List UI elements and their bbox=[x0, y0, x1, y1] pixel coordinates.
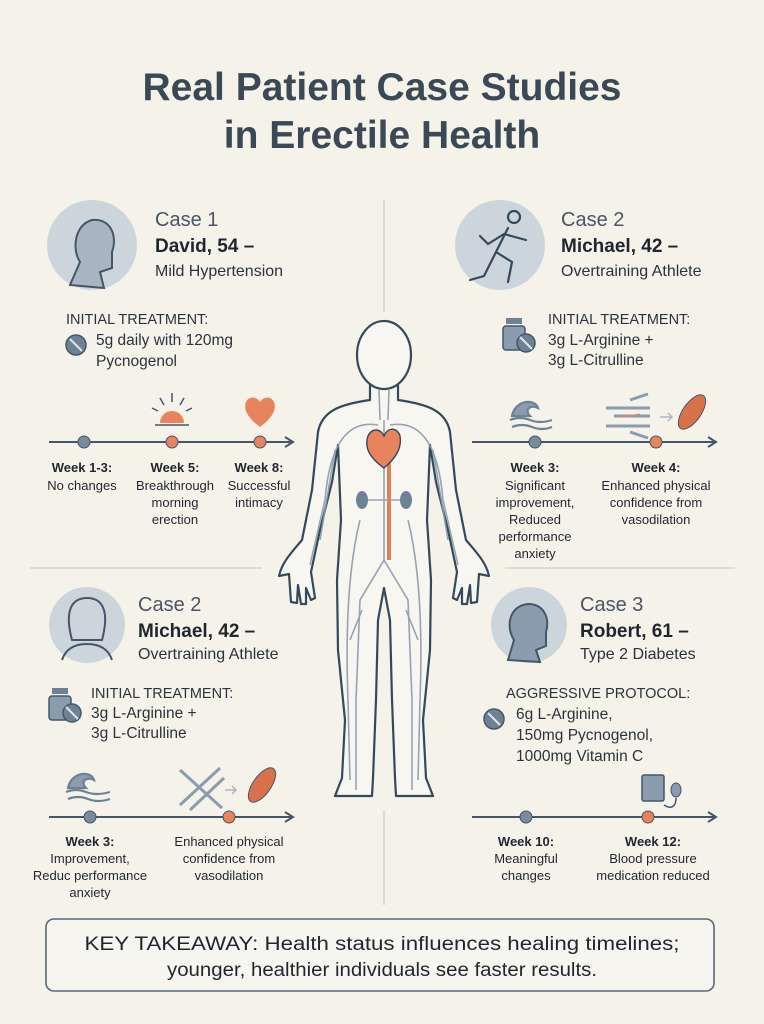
timeline case 3 bbox=[472, 811, 716, 823]
panel: case 1 David: Case 1 bbox=[155, 209, 218, 231]
panel: case 2 Michael top: 3g L-Arginine + bbox=[548, 332, 654, 349]
panel: case 3 Robert: Type 2 Diabetes bbox=[580, 646, 696, 663]
icon: bottle bbox=[503, 318, 535, 352]
icon: avatar David bbox=[47, 200, 137, 290]
panel: case 3 Robert: Blood pressure bbox=[609, 851, 697, 866]
panel: case 1 David: No changes bbox=[47, 478, 117, 493]
panel: case 1 David: Week 1-3: bbox=[52, 460, 112, 475]
panel: case 1 David: David, 54 – bbox=[155, 236, 254, 257]
icon: vessel to muscle bbox=[180, 763, 281, 810]
panel: case 3 Robert: 150mg Pycnogenol, bbox=[516, 727, 653, 744]
panel: case 2 Michael top bbox=[455, 200, 716, 561]
icon: heart bbox=[367, 429, 400, 468]
title: in Erectile Health bbox=[224, 114, 540, 157]
panel: case 2 Michael top: 3g L-Citrulline bbox=[548, 352, 644, 369]
panel: case 3 Robert: changes bbox=[501, 868, 551, 883]
icon: avatar runner bbox=[455, 200, 545, 290]
panel: case 2 Michael bottom: Reduc performance bbox=[33, 868, 147, 883]
panel: case 2 Michael bottom: 3g L-Arginine + bbox=[91, 705, 197, 722]
panel: case 2 Michael bottom: Enhanced physical bbox=[174, 834, 284, 849]
panel: case 1 David: intimacy bbox=[235, 495, 283, 510]
panel: case 2 Michael bottom: Overtraining Athlete bbox=[138, 646, 279, 663]
panel: case 1 David: Week 5: bbox=[151, 460, 199, 475]
panel: case 2 Michael top: confidence from bbox=[610, 495, 702, 510]
icon: blood pressure cuff bbox=[642, 775, 681, 807]
panel: case 1 David: Successful bbox=[228, 478, 291, 493]
panel: case 2 Michael bottom: INITIAL TREATMENT: bbox=[91, 686, 233, 702]
panel: case 2 Michael top: improvement, bbox=[496, 495, 574, 510]
panel: case 1 David: erection bbox=[152, 512, 198, 527]
panel: case 2 Michael top: Case 2 bbox=[561, 209, 624, 231]
panel: case 2 Michael top: Week 4: bbox=[632, 460, 680, 475]
panel: case 2 Michael bottom: 3g L-Citrulline bbox=[91, 725, 187, 742]
panel: case 2 Michael bottom: vasodilation bbox=[195, 868, 263, 883]
panel: case 1 David bbox=[47, 200, 293, 527]
panel: case 1 David: 5g daily with 120mg bbox=[96, 332, 233, 349]
panel: case 3 Robert: 6g L-Arginine, bbox=[516, 706, 613, 723]
callout: key takeaway bbox=[46, 919, 714, 991]
dividers bbox=[30, 200, 735, 905]
panel: case 3 Robert: medication reduced bbox=[596, 868, 710, 883]
panel: case 3 Robert: Week 10: bbox=[498, 834, 554, 849]
panel: case 2 Michael top: INITIAL TREATMENT: bbox=[548, 312, 690, 328]
panel: case 1 David: morning bbox=[152, 495, 198, 510]
panel: case 3 Robert: Week 12: bbox=[625, 834, 681, 849]
panel: case 2 Michael bottom: Improvement, bbox=[50, 851, 130, 866]
panel: case 3 Robert: AGGRESSIVE PROTOCOL: bbox=[506, 686, 690, 702]
panel: case 1 David: Pycnogenol bbox=[96, 353, 177, 370]
panel: case 3 Robert: Case 3 bbox=[580, 594, 643, 616]
icon: wave bbox=[66, 774, 110, 801]
panel: case 3 Robert: Robert, 61 – bbox=[580, 621, 689, 642]
callout: key takeaway: younger, healthier individuals see faster results. bbox=[167, 960, 597, 981]
panel: case 2 Michael top: Overtraining Athlete bbox=[561, 263, 702, 280]
panel: case 3 Robert: Meaningful bbox=[494, 851, 558, 866]
timeline case 1 bbox=[49, 436, 293, 448]
panel: case 2 Michael top: vasodilation bbox=[622, 512, 690, 527]
icon: pill bbox=[484, 709, 504, 729]
panel: case 3 Robert bbox=[472, 587, 716, 883]
panel: case 1 David: Breakthrough bbox=[136, 478, 214, 493]
panel: case 2 Michael bottom: anxiety bbox=[69, 885, 111, 900]
panel: case 2 Michael top: Reduced bbox=[509, 512, 561, 527]
panel: case 2 Michael bottom bbox=[33, 587, 293, 900]
panel: case 2 Michael top: Enhanced physical bbox=[601, 478, 711, 493]
panel: case 2 Michael bottom: Week 3: bbox=[66, 834, 114, 849]
panel: case 2 Michael top: anxiety bbox=[514, 546, 556, 561]
timeline case 2 top bbox=[472, 436, 716, 448]
panel: case 1 David: INITIAL TREATMENT: bbox=[66, 312, 208, 328]
panel: case 1 David: Mild Hypertension bbox=[155, 263, 283, 280]
icon: wave bbox=[510, 402, 552, 429]
panel: case 1 David: Week 8: bbox=[235, 460, 283, 475]
timeline case 2 bottom bbox=[49, 811, 293, 823]
title bbox=[142, 66, 622, 157]
panel: case 2 Michael top: performance bbox=[499, 529, 571, 544]
panel: case 2 Michael bottom: Case 2 bbox=[138, 594, 201, 616]
icon: sunrise bbox=[152, 393, 192, 425]
title: Real Patient Case Studies bbox=[142, 66, 622, 109]
icon: bottle bbox=[49, 688, 81, 722]
icon: pill bbox=[66, 335, 86, 355]
panel: case 2 Michael bottom: Michael, 42 – bbox=[138, 621, 255, 642]
icon: avatar Michael bbox=[49, 587, 125, 663]
body illustration bbox=[279, 321, 489, 796]
panel: case 2 Michael top: Michael, 42 – bbox=[561, 236, 678, 257]
icon: heart small bbox=[245, 398, 275, 427]
panel: case 2 Michael top: Week 3: bbox=[511, 460, 559, 475]
panel: case 2 Michael bottom: confidence from bbox=[183, 851, 275, 866]
icon: avatar Robert bbox=[491, 587, 567, 663]
panel: case 3 Robert: 1000mg Vitamin C bbox=[516, 748, 643, 765]
panel: case 2 Michael top: Significant bbox=[505, 478, 565, 493]
icon: vessel to muscle bbox=[606, 390, 711, 438]
callout: key takeaway: KEY TAKEAWAY: Health status influences healing timelines; bbox=[84, 934, 680, 955]
